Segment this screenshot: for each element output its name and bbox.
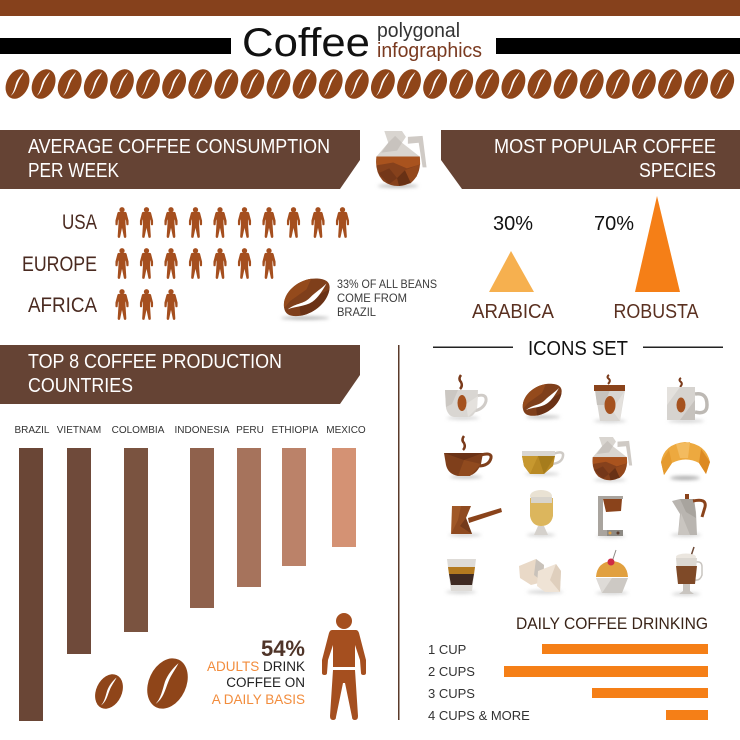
- panel heading: average coffee consumption: AVERAGE COFFEE CONSUMPTION: [28, 136, 330, 158]
- title block: [0, 20, 740, 65]
- callout: 54% adults drink coffee: A DAILY BASIS: [212, 692, 305, 707]
- icon: brown cup: [444, 436, 491, 478]
- icons set grid: [444, 375, 710, 596]
- pictogram row: USA: [62, 208, 349, 237]
- icon: white cup: [445, 375, 486, 420]
- panel heading: top 8 production countries: COUNTRIES: [28, 375, 133, 397]
- bar chart: daily coffee drinking: 3 CUPS: [428, 686, 475, 701]
- icon: sugar cubes: [519, 559, 563, 594]
- title block: infographics: [377, 40, 482, 62]
- title block: polygonal: [377, 20, 460, 42]
- chart: species triangles: 30%: [493, 213, 533, 235]
- callout: 33% of beans from Brazil: COME FROM: [337, 291, 407, 305]
- bar chart: production countries: MEXICO: [326, 425, 366, 436]
- bar chart: daily coffee drinking: [428, 614, 708, 723]
- bar chart: daily coffee drinking: 4 CUPS & MORE: [428, 708, 530, 723]
- panel heading: most popular coffee species: SPECIES: [639, 160, 716, 182]
- icon: coffee pot: [593, 437, 632, 482]
- icon: shot glass: [446, 559, 476, 594]
- icon: mug: [667, 378, 707, 422]
- icon: polygon bean: [523, 384, 562, 418]
- chart: species triangles: [472, 196, 699, 323]
- icon: coffee pot centre: [376, 131, 427, 188]
- icon: golden cup: [522, 451, 563, 476]
- pictogram row: Africa: [28, 290, 177, 319]
- panel heading: most popular coffee species: MOST POPULAR COFFEE: [494, 136, 716, 158]
- top band: [0, 0, 740, 16]
- icon: large person: [322, 613, 366, 720]
- icon: moka pot: [671, 494, 705, 536]
- pictogram row: Europe: EUROPE: [22, 253, 97, 276]
- bar chart: production countries: [14, 425, 366, 721]
- panel heading: most popular coffee species: [441, 130, 740, 189]
- pictogram row: USA: USA: [62, 211, 97, 234]
- panel heading: average coffee consumption: PER WEEK: [28, 160, 120, 182]
- heading: icons set: ICONS SET: [528, 338, 628, 360]
- panel heading: top 8 production countries: [0, 345, 360, 404]
- panel heading: average coffee consumption: [0, 130, 360, 189]
- callout: 33% of beans from Brazil: 33% OF ALL BEANS: [337, 277, 437, 291]
- icon: croissant: [661, 442, 710, 480]
- chart: species triangles: 70%: [594, 213, 634, 235]
- bar chart: daily coffee drinking: 1 CUP: [428, 642, 466, 657]
- chart: species triangles: ROBUSTA: [614, 301, 699, 323]
- bar chart: production countries: INDONESIA: [174, 425, 230, 436]
- bar chart: production countries: COLOMBIA: [112, 425, 165, 436]
- bar chart: daily coffee drinking: DAILY COFFEE DRINKING: [516, 614, 708, 633]
- callout: 54% adults drink coffee: COFFEE ON: [226, 675, 305, 690]
- icon: paper cup: [594, 375, 626, 422]
- bar chart: daily coffee drinking: 2 CUPS: [428, 664, 475, 679]
- icon: cupcake: [596, 550, 628, 594]
- bar chart: production countries: PERU: [236, 425, 264, 436]
- pictogram row: Europe: [22, 249, 275, 278]
- bar chart: production countries: VIETNAM: [57, 425, 101, 436]
- icon: coffee machine: [597, 496, 625, 538]
- bar chart: production countries: ETHIOPIA: [272, 425, 319, 436]
- icon: irish coffee: [672, 547, 702, 596]
- divider: [398, 345, 400, 720]
- callout: 54% adults drink coffee: [207, 636, 305, 707]
- row of coffee beans: [1, 65, 739, 103]
- callout: 54% adults drink coffee: 54%: [261, 636, 305, 661]
- callout: 33% of beans from Brazil: BRAZIL: [337, 305, 376, 319]
- icon: cezve: [449, 506, 502, 536]
- icon: latte glass: [527, 490, 555, 536]
- pictogram row: Africa: AFRICA: [28, 294, 97, 317]
- callout: 54% adults drink coffee: ADULTS DRINK: [207, 659, 305, 674]
- bar chart: production countries: BRAZIL: [14, 425, 50, 436]
- panel heading: top 8 production countries: TOP 8 COFFEE PRODUCTION: [28, 351, 282, 373]
- chart: species triangles: ARABICA: [472, 301, 555, 323]
- title block: Coffee: [242, 21, 370, 65]
- callout: 33% of beans from Brazil: [281, 277, 437, 320]
- icon: two beans: [90, 652, 196, 715]
